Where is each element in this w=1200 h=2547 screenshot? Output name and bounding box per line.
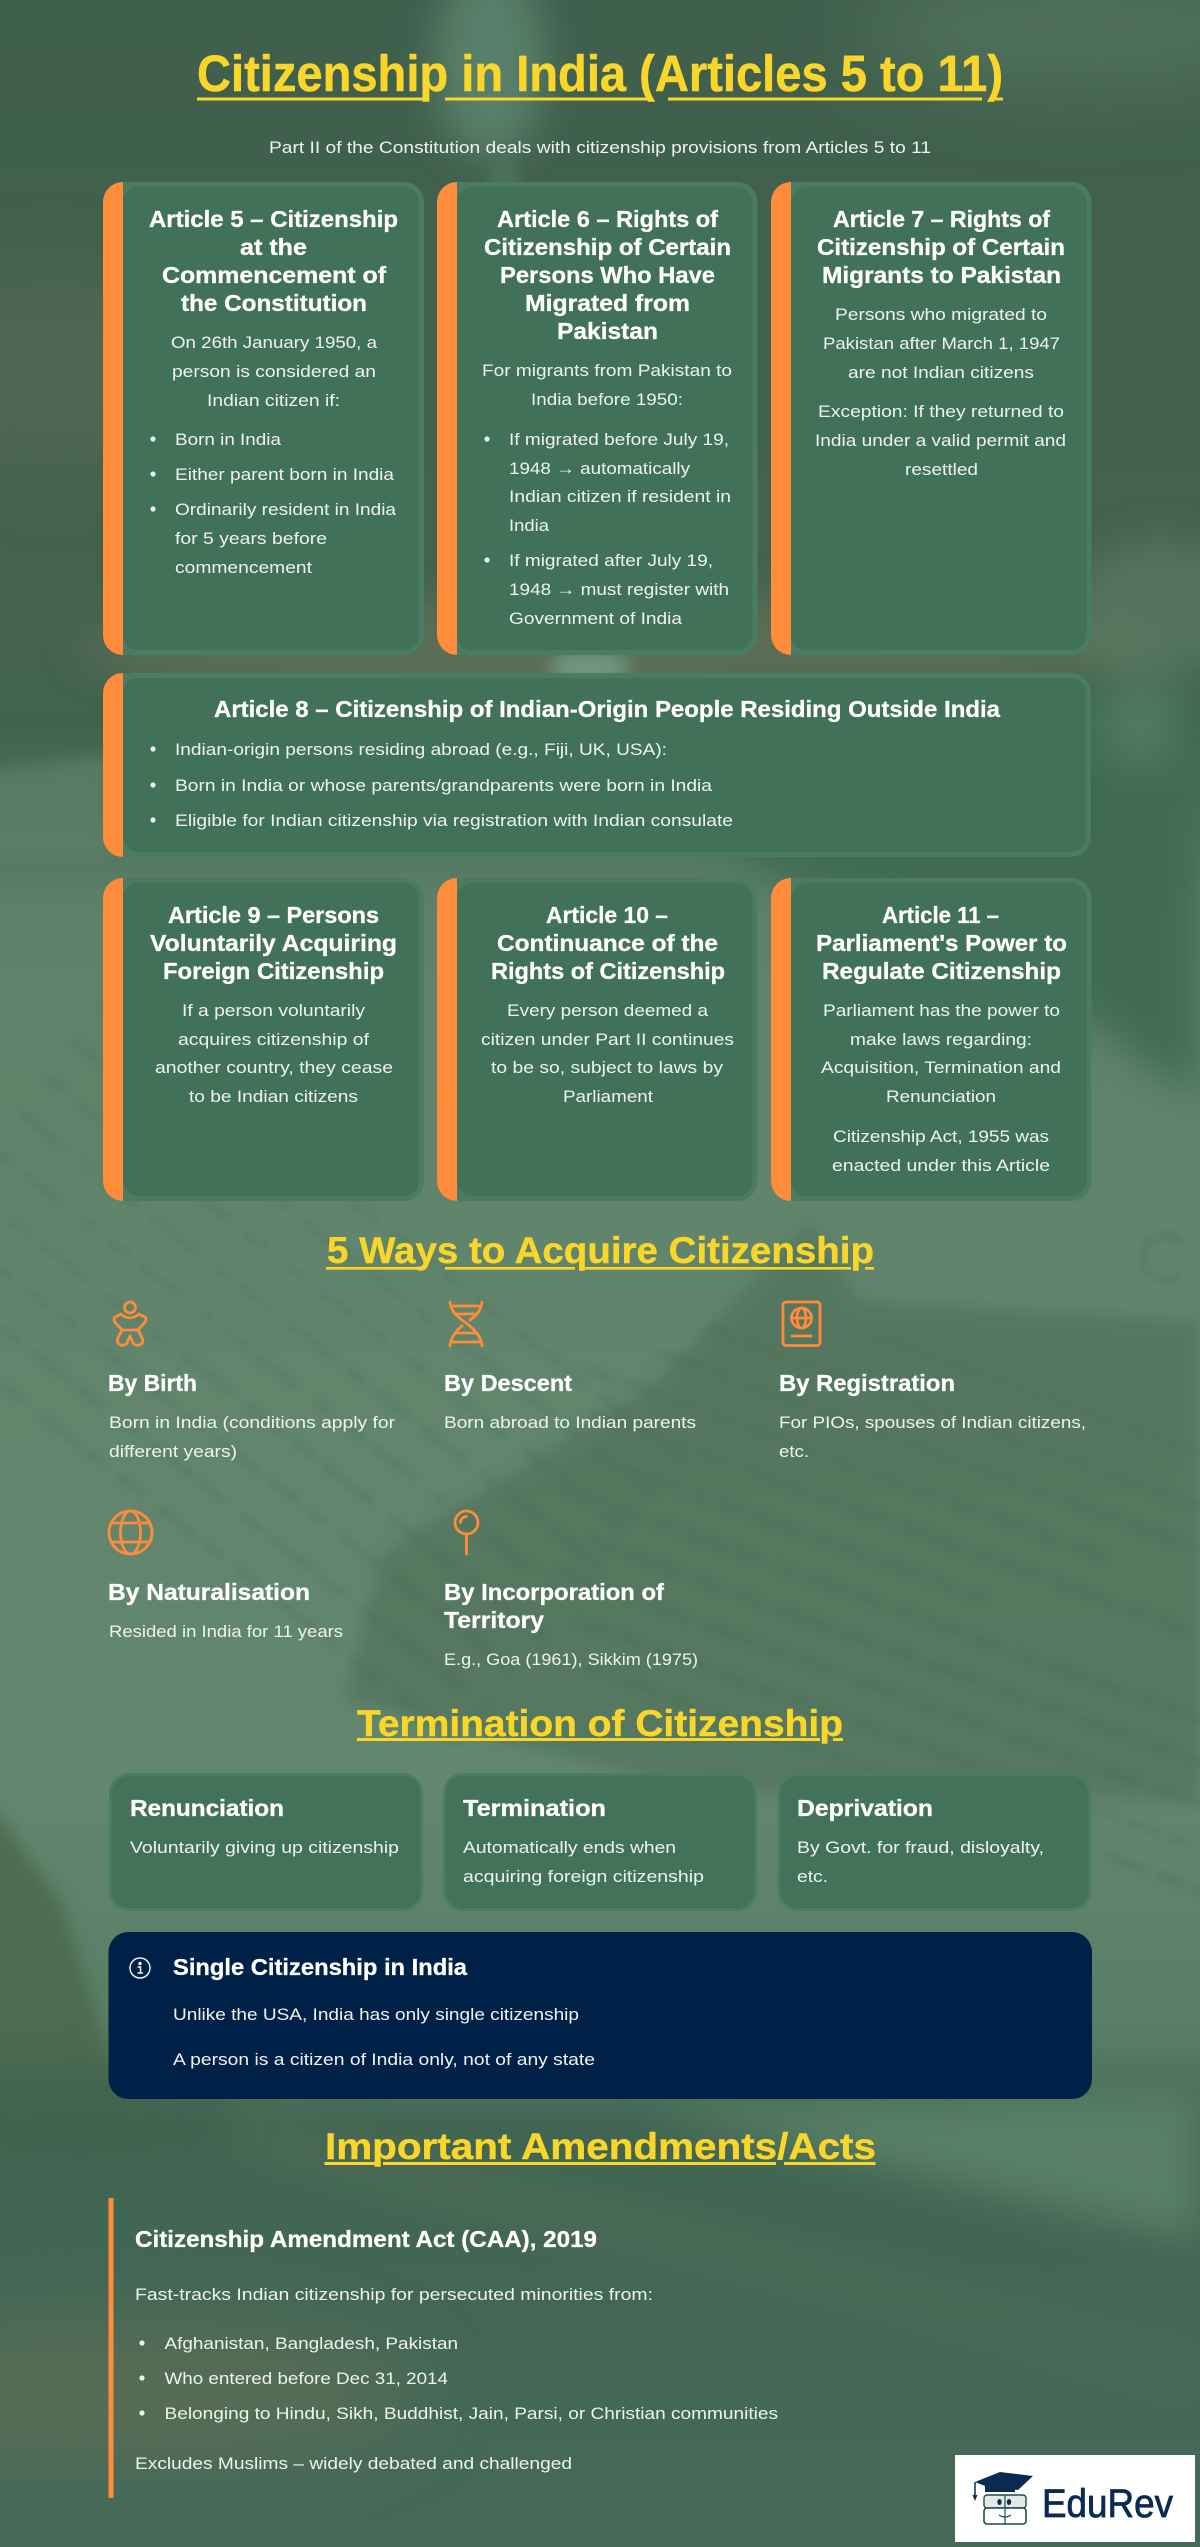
heading: 5 Ways to Acquire Citizenship: 5 Ways to Acquire Citizenship <box>327 1230 874 1271</box>
heading: Article 6: Migrated from <box>525 290 690 316</box>
panel: Termination <box>443 1773 757 1911</box>
list: Article 8 points: Born in India or whose parents/grandparents were born in India <box>175 776 713 795</box>
panel: Article 11 <box>771 878 1092 1201</box>
panel: Termination: Termination <box>463 1795 606 1821</box>
icon: map pin <box>455 1511 478 1554</box>
text: Article 9 body: If a person voluntarily <box>182 1001 366 1020</box>
callout: Single Citizenship in India: Unlike the USA, India has only single citizenship <box>173 2005 579 2024</box>
way: By Incorporation of Territory: E.g., Goa (1961), Sikkim (1975) <box>444 1650 698 1669</box>
heading: Article 6: Article 6 – Rights of <box>497 206 718 232</box>
list: Article 6 conditions: 1948 → automatically <box>509 459 691 478</box>
text: Article 5 intro <box>171 333 378 410</box>
text: Article 9 body <box>155 1001 393 1106</box>
text: Article 6 intro: For migrants from Pakistan to <box>482 361 732 380</box>
text: Article 10 body <box>481 1001 734 1106</box>
text: By Birth description: different years) <box>109 1442 237 1461</box>
heading: Important Amendments/Acts: Important Amendments/Acts <box>325 2126 876 2167</box>
panel: Renunciation: Renunciation <box>130 1795 284 1821</box>
text: Deprivation description <box>797 1838 1044 1886</box>
callout: Single Citizenship in India <box>108 1932 1092 2099</box>
heading: Article 5: at the <box>240 234 307 260</box>
text: Article 10 body: citizen under Part II continues <box>481 1030 734 1049</box>
text: Article 7 body <box>815 305 1066 479</box>
text: Article 11 body: Renunciation <box>886 1087 996 1106</box>
text: Article 9 body: acquires citizenship of <box>178 1030 369 1049</box>
panel: Citizenship Amendment Act: Fast-tracks Indian citizenship for persecuted minorities from: <box>135 2285 653 2304</box>
panel: Article 10 <box>437 878 758 1201</box>
heading: Article 11: Parliament's Power to <box>816 930 1067 956</box>
panel: Article 7 <box>771 182 1092 655</box>
heading: Termination of Citizenship: Termination of Citizenship <box>357 1703 843 1744</box>
panel: Article 8 <box>103 673 1091 857</box>
heading: Article 10: Article 10 – <box>546 902 668 928</box>
list: Article 5 conditions: for 5 years before <box>175 529 327 548</box>
list: Article 5 conditions: Ordinarily resident in India <box>175 500 397 519</box>
heading: Article 10: Rights of Citizenship <box>491 958 725 984</box>
list: Article 8 points <box>150 740 733 830</box>
text: Article 11 body: make laws regarding: <box>850 1030 1032 1049</box>
list: Article 5 conditions: Either parent born in India <box>175 465 395 484</box>
text: Article 10 body: Parliament <box>563 1087 653 1106</box>
text: Deprivation description: etc. <box>797 1867 828 1886</box>
way: By Naturalisation <box>108 1511 343 1641</box>
icon: passport <box>783 1302 820 1346</box>
text: Article 5 intro: person is considered an <box>172 362 376 381</box>
way: By Naturalisation: Resided in India for 11 years <box>109 1622 343 1641</box>
way: By Incorporation of Territory <box>444 1511 698 1669</box>
panel: Citizenship Amendment Act <box>108 2198 778 2498</box>
text: Article 7 body: are not Indian citizens <box>848 363 1034 382</box>
heading: Article 5: the Constitution <box>181 290 367 316</box>
text: Article 7 body: Persons who migrated to <box>835 305 1047 324</box>
list: Article 6 conditions: Indian citizen if resident in <box>509 487 731 506</box>
heading: Article 11 <box>816 902 1067 984</box>
list: CAA conditions <box>139 2334 778 2423</box>
panel: Article 6 <box>437 182 758 655</box>
heading: Article 7: Citizenship of Certain <box>817 234 1065 260</box>
heading: Article 9: Article 9 – Persons <box>168 902 379 928</box>
heading: Article 7: Article 7 – Rights of <box>833 206 1050 232</box>
text: By Birth description: Born in India (conditions apply for <box>109 1413 395 1432</box>
text: Article 11 body: Acquisition, Termination and <box>821 1058 1061 1077</box>
list: Article 6 conditions: If migrated after July 19, <box>509 551 713 570</box>
text: Article 7 body: India under a valid permit and <box>815 431 1066 450</box>
list: Article 6 conditions: India <box>509 516 550 535</box>
callout: Single Citizenship in India: Single Citizenship in India <box>173 1954 467 1980</box>
text: Article 5 intro: Indian citizen if: <box>207 391 340 410</box>
way: By Registration: By Registration <box>779 1370 955 1396</box>
list: CAA conditions: Belonging to Hindu, Sikh, Buddhist, Jain, Parsi, or Christian communities <box>164 2404 778 2423</box>
heading: By Incorporation of Territory <box>444 1579 664 1633</box>
heading: By Incorporation of Territory: By Incorporation of <box>444 1579 664 1605</box>
list: Article 6 conditions: Government of India <box>509 609 683 628</box>
text: Article 10 body: Every person deemed a <box>507 1001 709 1020</box>
heading: Article 7: Migrants to Pakistan <box>822 262 1061 288</box>
icon: info <box>130 1958 150 1978</box>
text: Termination description: acquiring foreign citizenship <box>463 1867 704 1886</box>
text: By Registration description: For PIOs, spouses of Indian citizens, <box>779 1413 1086 1432</box>
heading: Article 6: Persons Who Have <box>500 262 715 288</box>
panel: Deprivation: Deprivation <box>797 1795 933 1821</box>
panel: Deprivation <box>778 1773 1091 1911</box>
list: CAA conditions: Afghanistan, Bangladesh, Pakistan <box>164 2334 458 2353</box>
way: By Birth <box>108 1302 395 1461</box>
list: CAA conditions: Who entered before Dec 31, 2014 <box>164 2369 448 2388</box>
text: Article 7 body: Pakistan after March 1, 1947 <box>823 334 1060 353</box>
way: By Descent <box>444 1302 696 1432</box>
heading: Article 6: Pakistan <box>557 318 658 344</box>
text: By Birth description <box>109 1413 395 1461</box>
panel: Article 5 <box>103 182 424 655</box>
logo: EduRev <box>955 2455 1195 2542</box>
panel: Citizenship Amendment Act: Citizenship Amendment Act (CAA), 2019 <box>135 2226 597 2252</box>
heading: Article 5: Commencement of <box>162 262 386 288</box>
heading: Article 9: Foreign Citizenship <box>163 958 384 984</box>
heading: Article 11: Regulate Citizenship <box>822 958 1061 984</box>
text: Article 7 body: Exception: If they returned to <box>818 402 1064 421</box>
way: By Naturalisation: By Naturalisation <box>108 1579 310 1605</box>
text: Article 9 body: to be Indian citizens <box>189 1087 358 1106</box>
way: By Registration <box>779 1302 1086 1461</box>
text: Article 11 body: enacted under this Article <box>832 1156 1050 1175</box>
icon: DNA helix <box>450 1302 482 1346</box>
logo: EduRev: EduRev <box>1042 2482 1173 2526</box>
text: Termination description <box>463 1838 704 1886</box>
heading: Article 5 <box>149 206 398 316</box>
panel: Renunciation: Voluntarily giving up citizenship <box>130 1838 399 1857</box>
panel: Citizenship Amendment Act: Excludes Muslims – widely debated and challenged <box>135 2454 572 2473</box>
list: Article 8 points: Eligible for Indian citizenship via registration with Indian consulate <box>175 811 733 830</box>
text: Termination description: Automatically ends when <box>463 1838 676 1857</box>
text: Article 5 intro: On 26th January 1950, a <box>171 333 378 352</box>
text: By Registration description: etc. <box>779 1442 809 1461</box>
heading: Article 8: Article 8 – Citizenship of Indian-Origin People Residing Outside India <box>214 696 1000 722</box>
list: Article 6 conditions <box>484 430 731 628</box>
list: Article 5 conditions: Born in India <box>175 430 282 449</box>
way: By Descent: By Descent <box>444 1370 572 1396</box>
text: Article 6 intro <box>482 361 732 409</box>
text: By Registration description <box>779 1413 1086 1461</box>
heading: By Incorporation of Territory: Territory <box>444 1607 544 1633</box>
heading: Article 9: Voluntarily Acquiring <box>150 930 397 956</box>
subtitle: Part II of the Constitution deals with citizenship provisions from Articles 5 to 11 <box>269 138 931 157</box>
icon: baby <box>114 1302 146 1345</box>
text: Article 10 body: to be so, subject to laws by <box>491 1058 724 1077</box>
way: By Descent: Born abroad to Indian parents <box>444 1413 696 1432</box>
heading: Article 7 <box>817 206 1065 288</box>
text: Article 7 body: resettled <box>905 460 978 479</box>
text: Article 11 body: Parliament has the power to <box>823 1001 1060 1020</box>
title: Citizenship in India (Articles 5 to 11) <box>197 45 1003 102</box>
panel: Article 9 <box>103 878 424 1201</box>
list: Article 6 conditions: If migrated before July 19, <box>509 430 729 449</box>
panel: Renunciation <box>109 1773 423 1911</box>
text: Article 11 body <box>821 1001 1061 1175</box>
text: Article 9 body: another country, they cease <box>155 1058 393 1077</box>
icon: graduation cap and book <box>972 2472 1033 2524</box>
text: Deprivation description: By Govt. for fraud, disloyalty, <box>797 1838 1044 1857</box>
icon: globe <box>109 1511 152 1554</box>
list: Article 6 conditions: 1948 → must register with <box>509 580 729 599</box>
text: Article 11 body: Citizenship Act, 1955 was <box>833 1127 1049 1146</box>
list: Article 8 points: Indian-origin persons residing abroad (e.g., Fiji, UK, USA): <box>175 740 667 759</box>
list: Article 5 conditions <box>150 430 397 577</box>
text: Article 6 intro: India before 1950: <box>531 390 683 409</box>
heading: Article 9 <box>150 902 397 984</box>
callout: Single Citizenship in India: A person is a citizen of India only, not of any state <box>173 2050 595 2069</box>
heading: Article 6 <box>484 206 731 344</box>
heading: Article 10 <box>491 902 725 984</box>
way: By Birth: By Birth <box>108 1370 197 1396</box>
heading: Article 10: Continuance of the <box>497 930 718 956</box>
list: Article 5 conditions: commencement <box>175 558 312 577</box>
heading: Article 5: Article 5 – Citizenship <box>149 206 398 232</box>
heading: Article 11: Article 11 – <box>882 902 999 928</box>
heading: Article 6: Citizenship of Certain <box>484 234 731 260</box>
